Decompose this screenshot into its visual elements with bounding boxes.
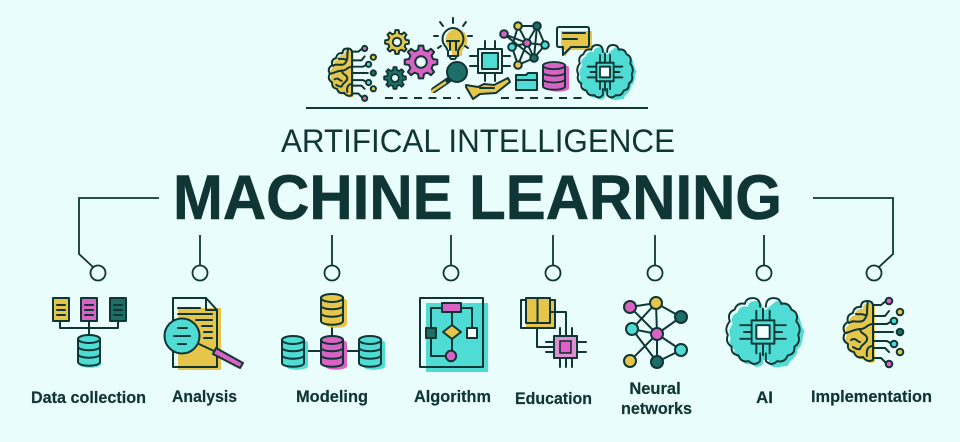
icon: algorithm xyxy=(420,298,488,372)
label: Education xyxy=(515,390,592,408)
icon: yellow gear xyxy=(385,30,409,54)
icon: implementation brain xyxy=(844,298,903,367)
label: Algorithm xyxy=(414,388,491,406)
icon: light bulb xyxy=(434,18,472,59)
icon: folder xyxy=(516,73,537,90)
icon: half brain circuit xyxy=(329,46,376,101)
connector lines xyxy=(79,198,893,280)
icon: AI brain xyxy=(726,298,805,367)
label: Implementation xyxy=(811,388,932,406)
icon: database xyxy=(543,62,569,92)
icon: magnifying glass xyxy=(431,62,467,92)
label: Data collection xyxy=(31,389,146,407)
icon: education xyxy=(521,298,586,367)
rule under icons xyxy=(306,107,648,109)
icon: neural networks xyxy=(624,297,687,368)
icon: speech bubble xyxy=(557,27,592,57)
icon: brain with chip xyxy=(577,45,637,100)
dashed baseline xyxy=(385,97,587,99)
icon: dark teal gear xyxy=(384,67,406,89)
label: AI xyxy=(756,389,773,407)
top icon cluster xyxy=(306,18,648,108)
label: Modeling xyxy=(296,388,368,406)
label: Neural xyxy=(629,380,681,398)
icon: data collection xyxy=(53,298,126,368)
label: Analysis xyxy=(172,388,237,406)
label: networks xyxy=(621,400,692,418)
icon: magenta gear xyxy=(405,46,437,78)
icon: network xyxy=(500,22,549,69)
icon: modeling xyxy=(282,294,385,370)
icon: hand xyxy=(466,78,510,99)
subtitle: ARTIFICAL INTELLIGENCE xyxy=(281,123,675,159)
title: MACHINE LEARNING xyxy=(173,163,782,233)
icon: chip xyxy=(470,41,510,81)
icon: analysis xyxy=(164,298,243,370)
